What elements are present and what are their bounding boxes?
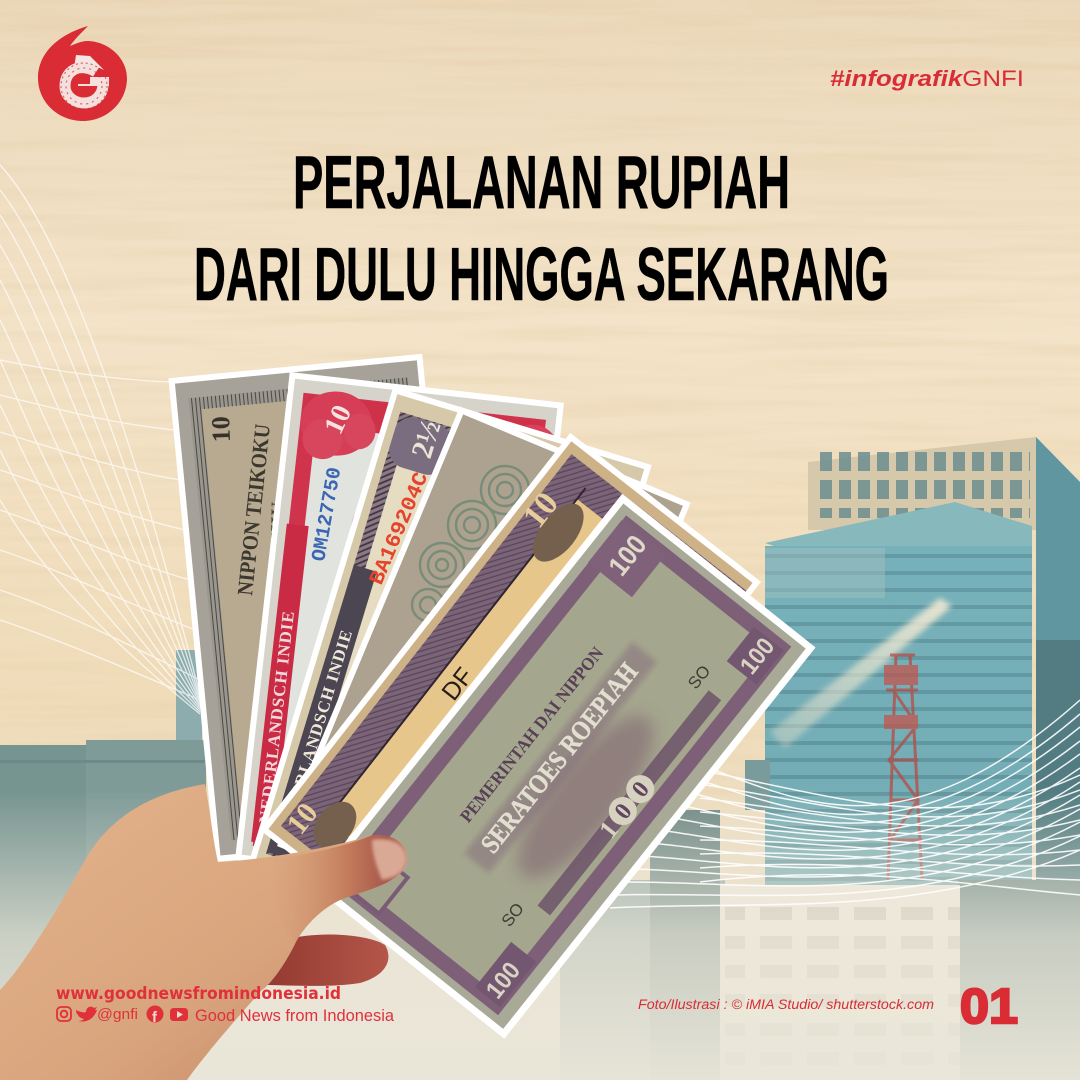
light beam	[770, 598, 952, 748]
fingertip	[262, 935, 388, 986]
icon: instagram	[57, 1007, 71, 1021]
logo emblem: eagle G	[61, 55, 109, 109]
banknote 3: purple 2 1/2: BA169204C	[366, 469, 434, 589]
banknote 6: 100 Seratoes Roepiah: 100	[602, 529, 653, 581]
banknote 6: 100 Seratoes Roepiah: PEMERINTAH DAI NIPPON	[456, 643, 607, 826]
mid buildings	[560, 760, 1080, 1080]
banknote 2: red Nederlandsch Indie: NEDERLANDSCH INDIE	[255, 609, 298, 824]
lower white building	[720, 885, 960, 1080]
banknote 5: tan 10: 10	[280, 797, 325, 841]
thumb shading	[269, 835, 407, 942]
central value ornament	[593, 763, 666, 844]
banknote 5: tan 10: DF	[436, 662, 479, 706]
banknote 6: 100 Seratoes Roepiah: SO	[684, 662, 714, 693]
banknote 1: Nippon Teikoku: 10	[206, 416, 236, 443]
banknote 3: purple 2 1/2: 2½	[405, 417, 448, 462]
radio tower	[884, 655, 922, 880]
banknote 1: Nippon Teikoku: NIPPON TEIKOKU	[232, 423, 275, 597]
palm and thumb	[0, 784, 407, 1080]
banknote 2: red Nederlandsch Indie: OM127750	[308, 466, 347, 563]
central value ornament: 00	[610, 764, 665, 824]
icon: facebook: f	[152, 1009, 158, 1026]
thumbnail	[372, 839, 406, 880]
bottom fade	[0, 790, 1080, 1080]
banknote 3: purple 2 1/2: NEDERLANDSCH INDIE	[276, 627, 356, 837]
handle: @gnfi	[97, 1006, 138, 1023]
icon: twitter	[76, 1007, 97, 1021]
photo credit: Foto/Ilustrasi : © iMIA Studio/ shutterstock.com	[638, 997, 934, 1012]
banknote 6: 100 Seratoes Roepiah	[311, 494, 816, 1039]
page name: Good News from Indonesia	[195, 1006, 395, 1025]
banknote 2: red Nederlandsch Indie	[235, 372, 564, 891]
banknote 6: 100 Seratoes Roepiah: 100	[735, 633, 780, 680]
logo GNFI	[38, 26, 127, 121]
green scroll ornament	[412, 466, 529, 621]
hand holding notes	[0, 784, 407, 1080]
wire net right	[610, 700, 1080, 908]
banknote 6: 100 Seratoes Roepiah: 100	[481, 957, 526, 1004]
central value ornament: 1	[593, 816, 624, 844]
banknote 4: grey with green scrolls	[277, 407, 691, 942]
hashtag: #infografik GNFI	[830, 66, 1024, 91]
back tower	[808, 437, 1080, 1000]
city skyline photo	[0, 437, 1080, 1080]
wire net left	[0, 165, 200, 714]
front tower	[765, 502, 1032, 906]
icon: youtube	[170, 1008, 188, 1021]
website url: www.goodnewsfromindonesia.id	[56, 984, 341, 1004]
banknote 5: tan 10: 10	[516, 485, 566, 535]
banknote 6: 100 Seratoes Roepiah: SERATOES ROEPIAH	[475, 657, 644, 859]
banknote 3: purple 2 1/2	[248, 387, 652, 943]
icon: facebook	[146, 1006, 164, 1026]
banknote 1: Nippon Teikoku	[168, 354, 469, 862]
social row	[57, 1006, 395, 1026]
left buildings	[0, 650, 206, 1035]
page number: 01	[960, 980, 1018, 1034]
banknote 2: red Nederlandsch Indie: 10	[318, 400, 358, 439]
banknotes fan	[168, 354, 816, 1039]
banknote 1: Nippon Teikoku: SEIHU	[267, 501, 289, 565]
banknote 6: 100 Seratoes Roepiah: SO	[498, 899, 528, 930]
title	[194, 140, 889, 316]
banknote 5: tan 10	[260, 433, 761, 979]
